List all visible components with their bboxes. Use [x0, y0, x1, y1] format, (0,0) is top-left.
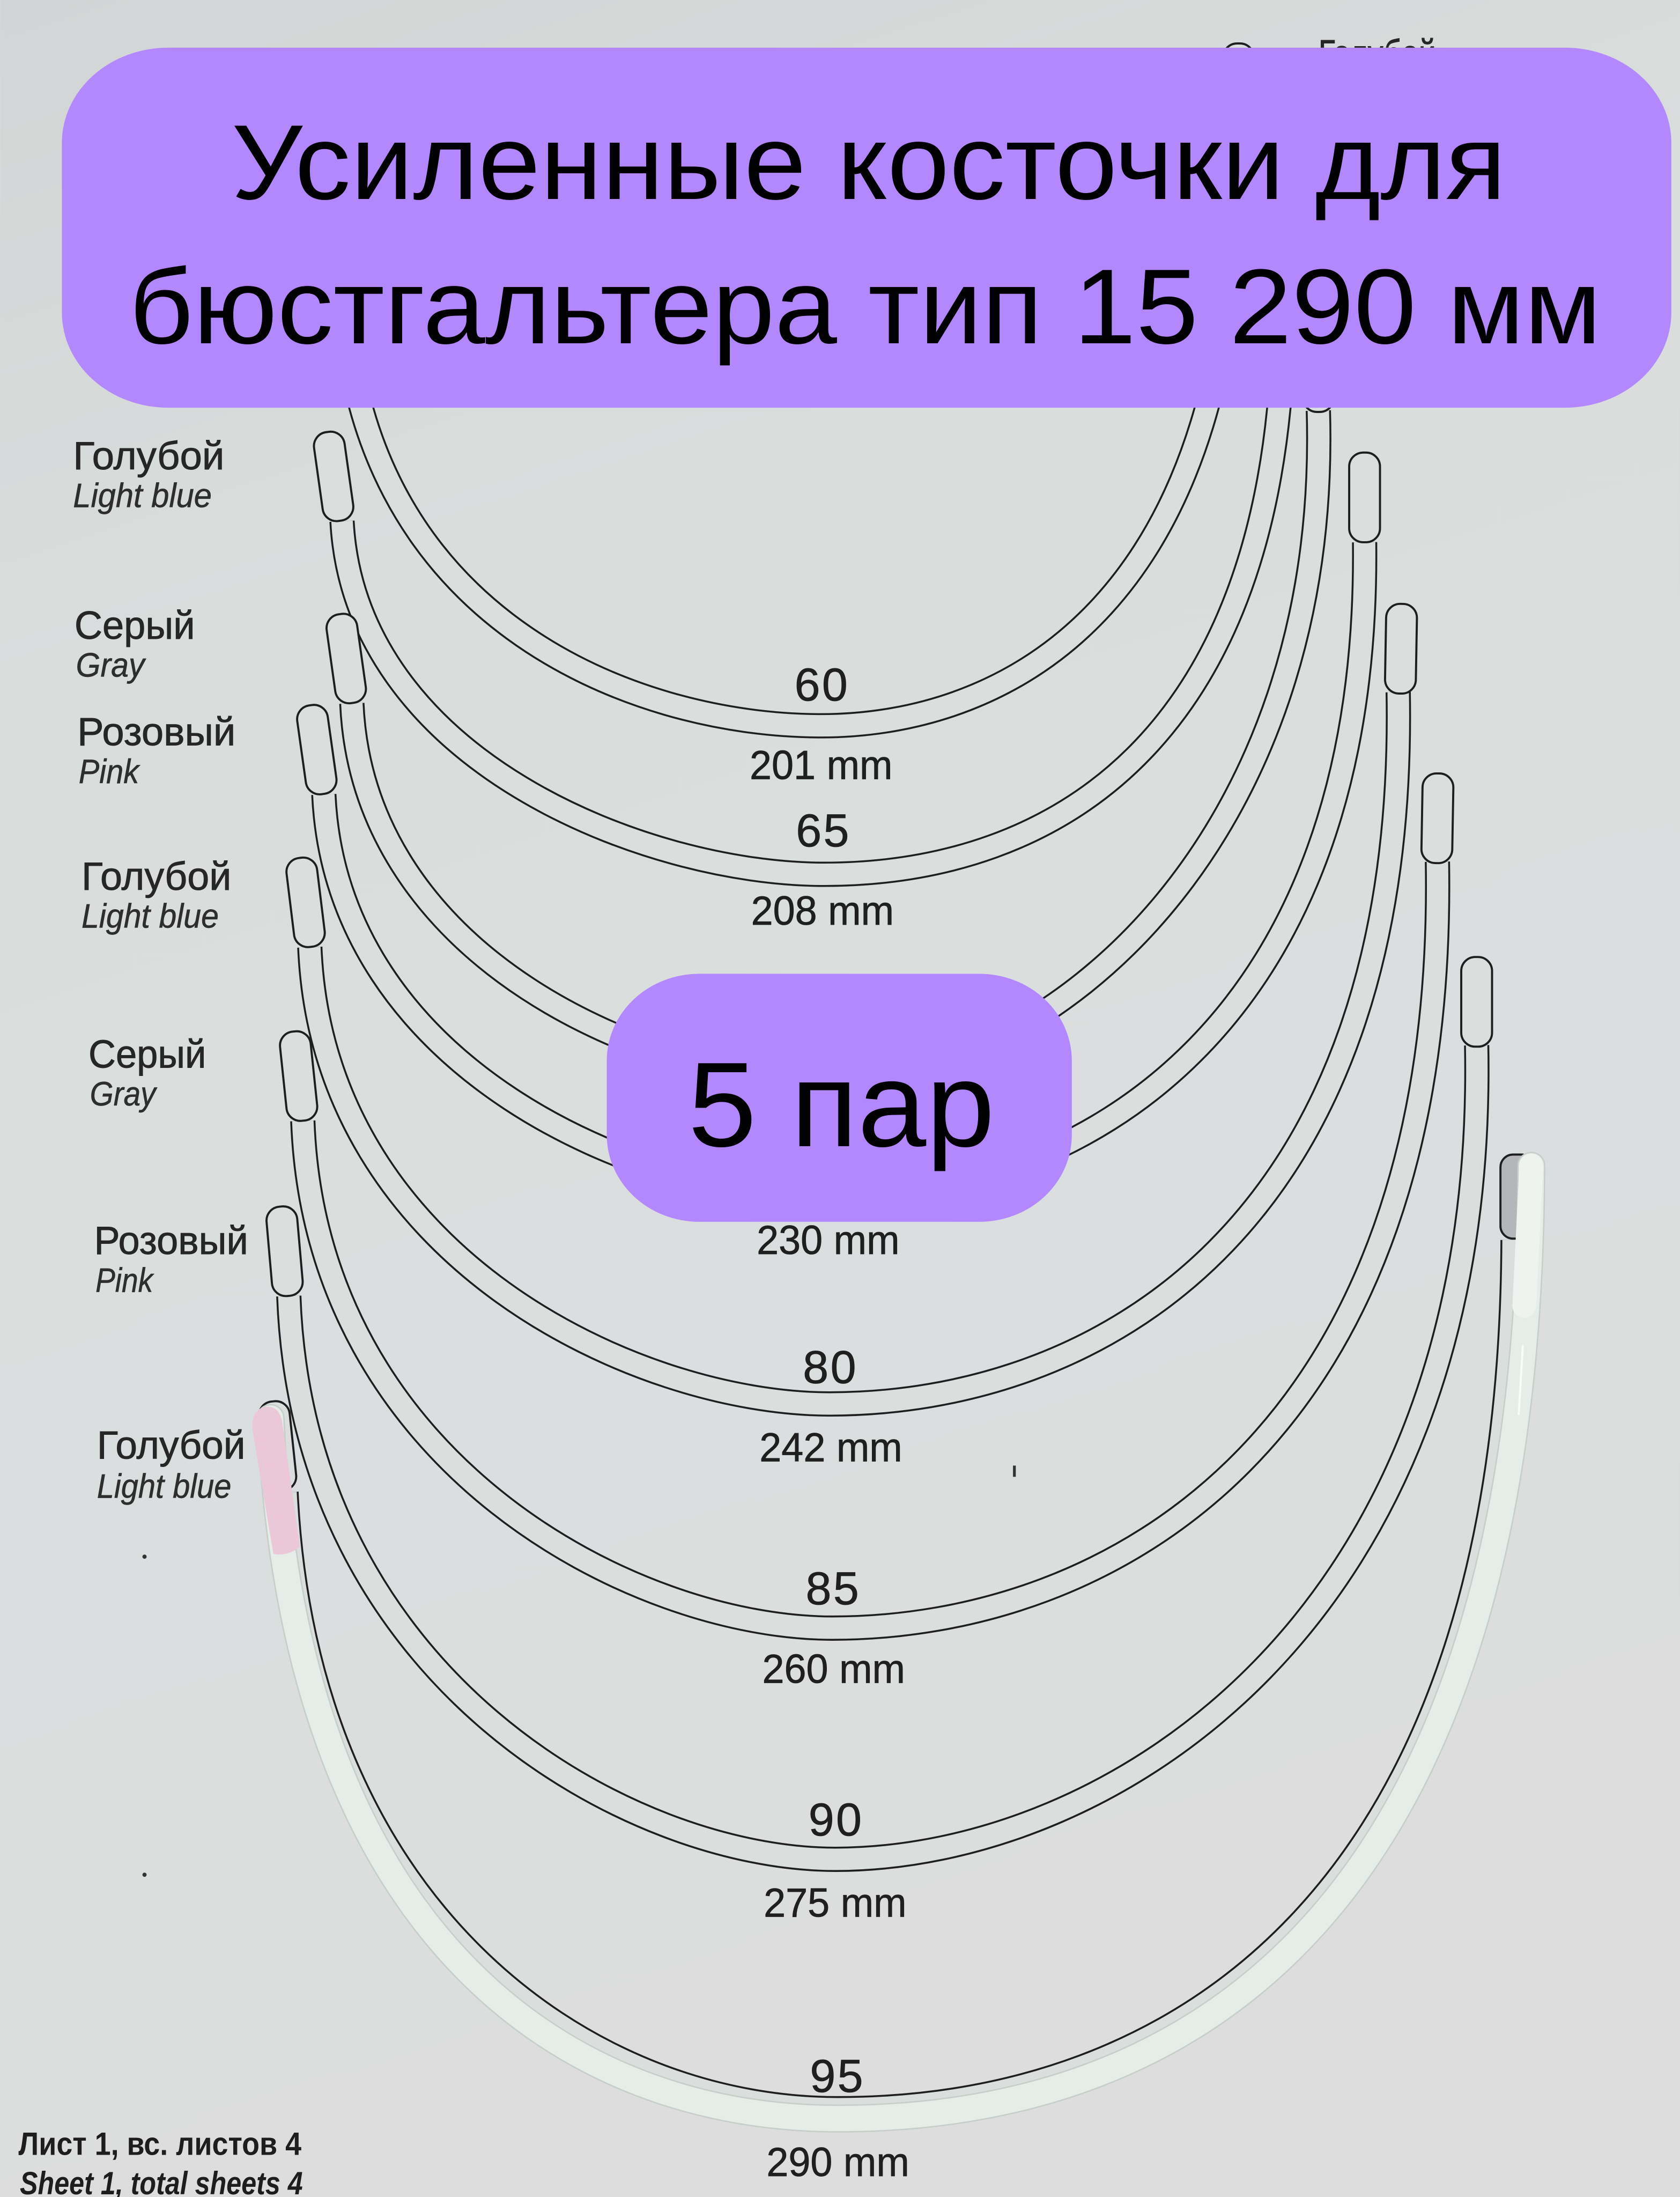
size labels: [750, 659, 909, 2185]
wire outline: size 65: [312, 266, 1284, 874]
colour labels: Pink: [95, 1262, 154, 1299]
colour labels: Light blue: [82, 897, 219, 935]
colour labels: Серый: [88, 1033, 206, 1077]
colour labels: Light blue: [73, 477, 212, 515]
wire outline: size 60: [343, 43, 1254, 726]
quantity badge: [607, 974, 1072, 1222]
size labels: 290 mm: [766, 2140, 909, 2185]
pink tip: [252, 1407, 300, 1554]
title text: Усиленные косточки для: [231, 103, 1506, 222]
title text: [129, 103, 1601, 366]
wire outline: size 75: [295, 453, 1380, 1198]
colour labels: Голубой: [73, 434, 224, 478]
wire outline: size 85: [279, 773, 1454, 1628]
size labels: 65: [796, 805, 849, 857]
size labels: 260 mm: [763, 1646, 905, 1692]
size labels: 242 mm: [759, 1425, 902, 1471]
footer: sheet number: [18, 2126, 303, 2197]
colour labels: Gray: [90, 1075, 158, 1113]
specks on the sheet: [143, 841, 1016, 1877]
size labels: 95: [810, 2051, 863, 2102]
colour labels: Голубой: [97, 1424, 246, 1467]
footer: sheet number: Лист 1, вс. листов 4: [18, 2126, 302, 2162]
colour labels: Розовый: [77, 711, 235, 754]
title text: бюстгальтера тип 15 290 мм: [129, 247, 1601, 366]
size labels: 275 mm: [764, 1881, 907, 1926]
wire outline: size 90: [265, 957, 1492, 1859]
colour labels: Серый: [75, 604, 195, 647]
size labels: 80: [803, 1341, 856, 1393]
size labels: 90: [809, 1794, 862, 1846]
wire outline: size 95: [257, 1154, 1534, 2108]
size labels: 230 mm: [757, 1218, 900, 1263]
colour labels: [73, 434, 248, 1505]
colour labels: Розовый: [94, 1219, 248, 1263]
quantity text: 5 пар: [688, 1037, 995, 1172]
size labels: 85: [805, 1563, 859, 1614]
size labels: 208 mm: [751, 888, 894, 934]
partial label hidden behind banner: Голубой: [1319, 32, 1436, 76]
colour labels: Light blue: [97, 1468, 231, 1505]
colour labels: Голубой: [82, 855, 231, 898]
colour labels: Pink: [79, 753, 140, 791]
colour labels: Gray: [76, 647, 146, 684]
size labels: 60: [795, 659, 848, 711]
title banner: [62, 48, 1671, 408]
wire outline: size 70: [325, 322, 1334, 1082]
real underwire: white tube with pink tip: [252, 1166, 1531, 2119]
wire outline: size 80: [285, 603, 1417, 1404]
size labels: 201 mm: [750, 742, 892, 788]
